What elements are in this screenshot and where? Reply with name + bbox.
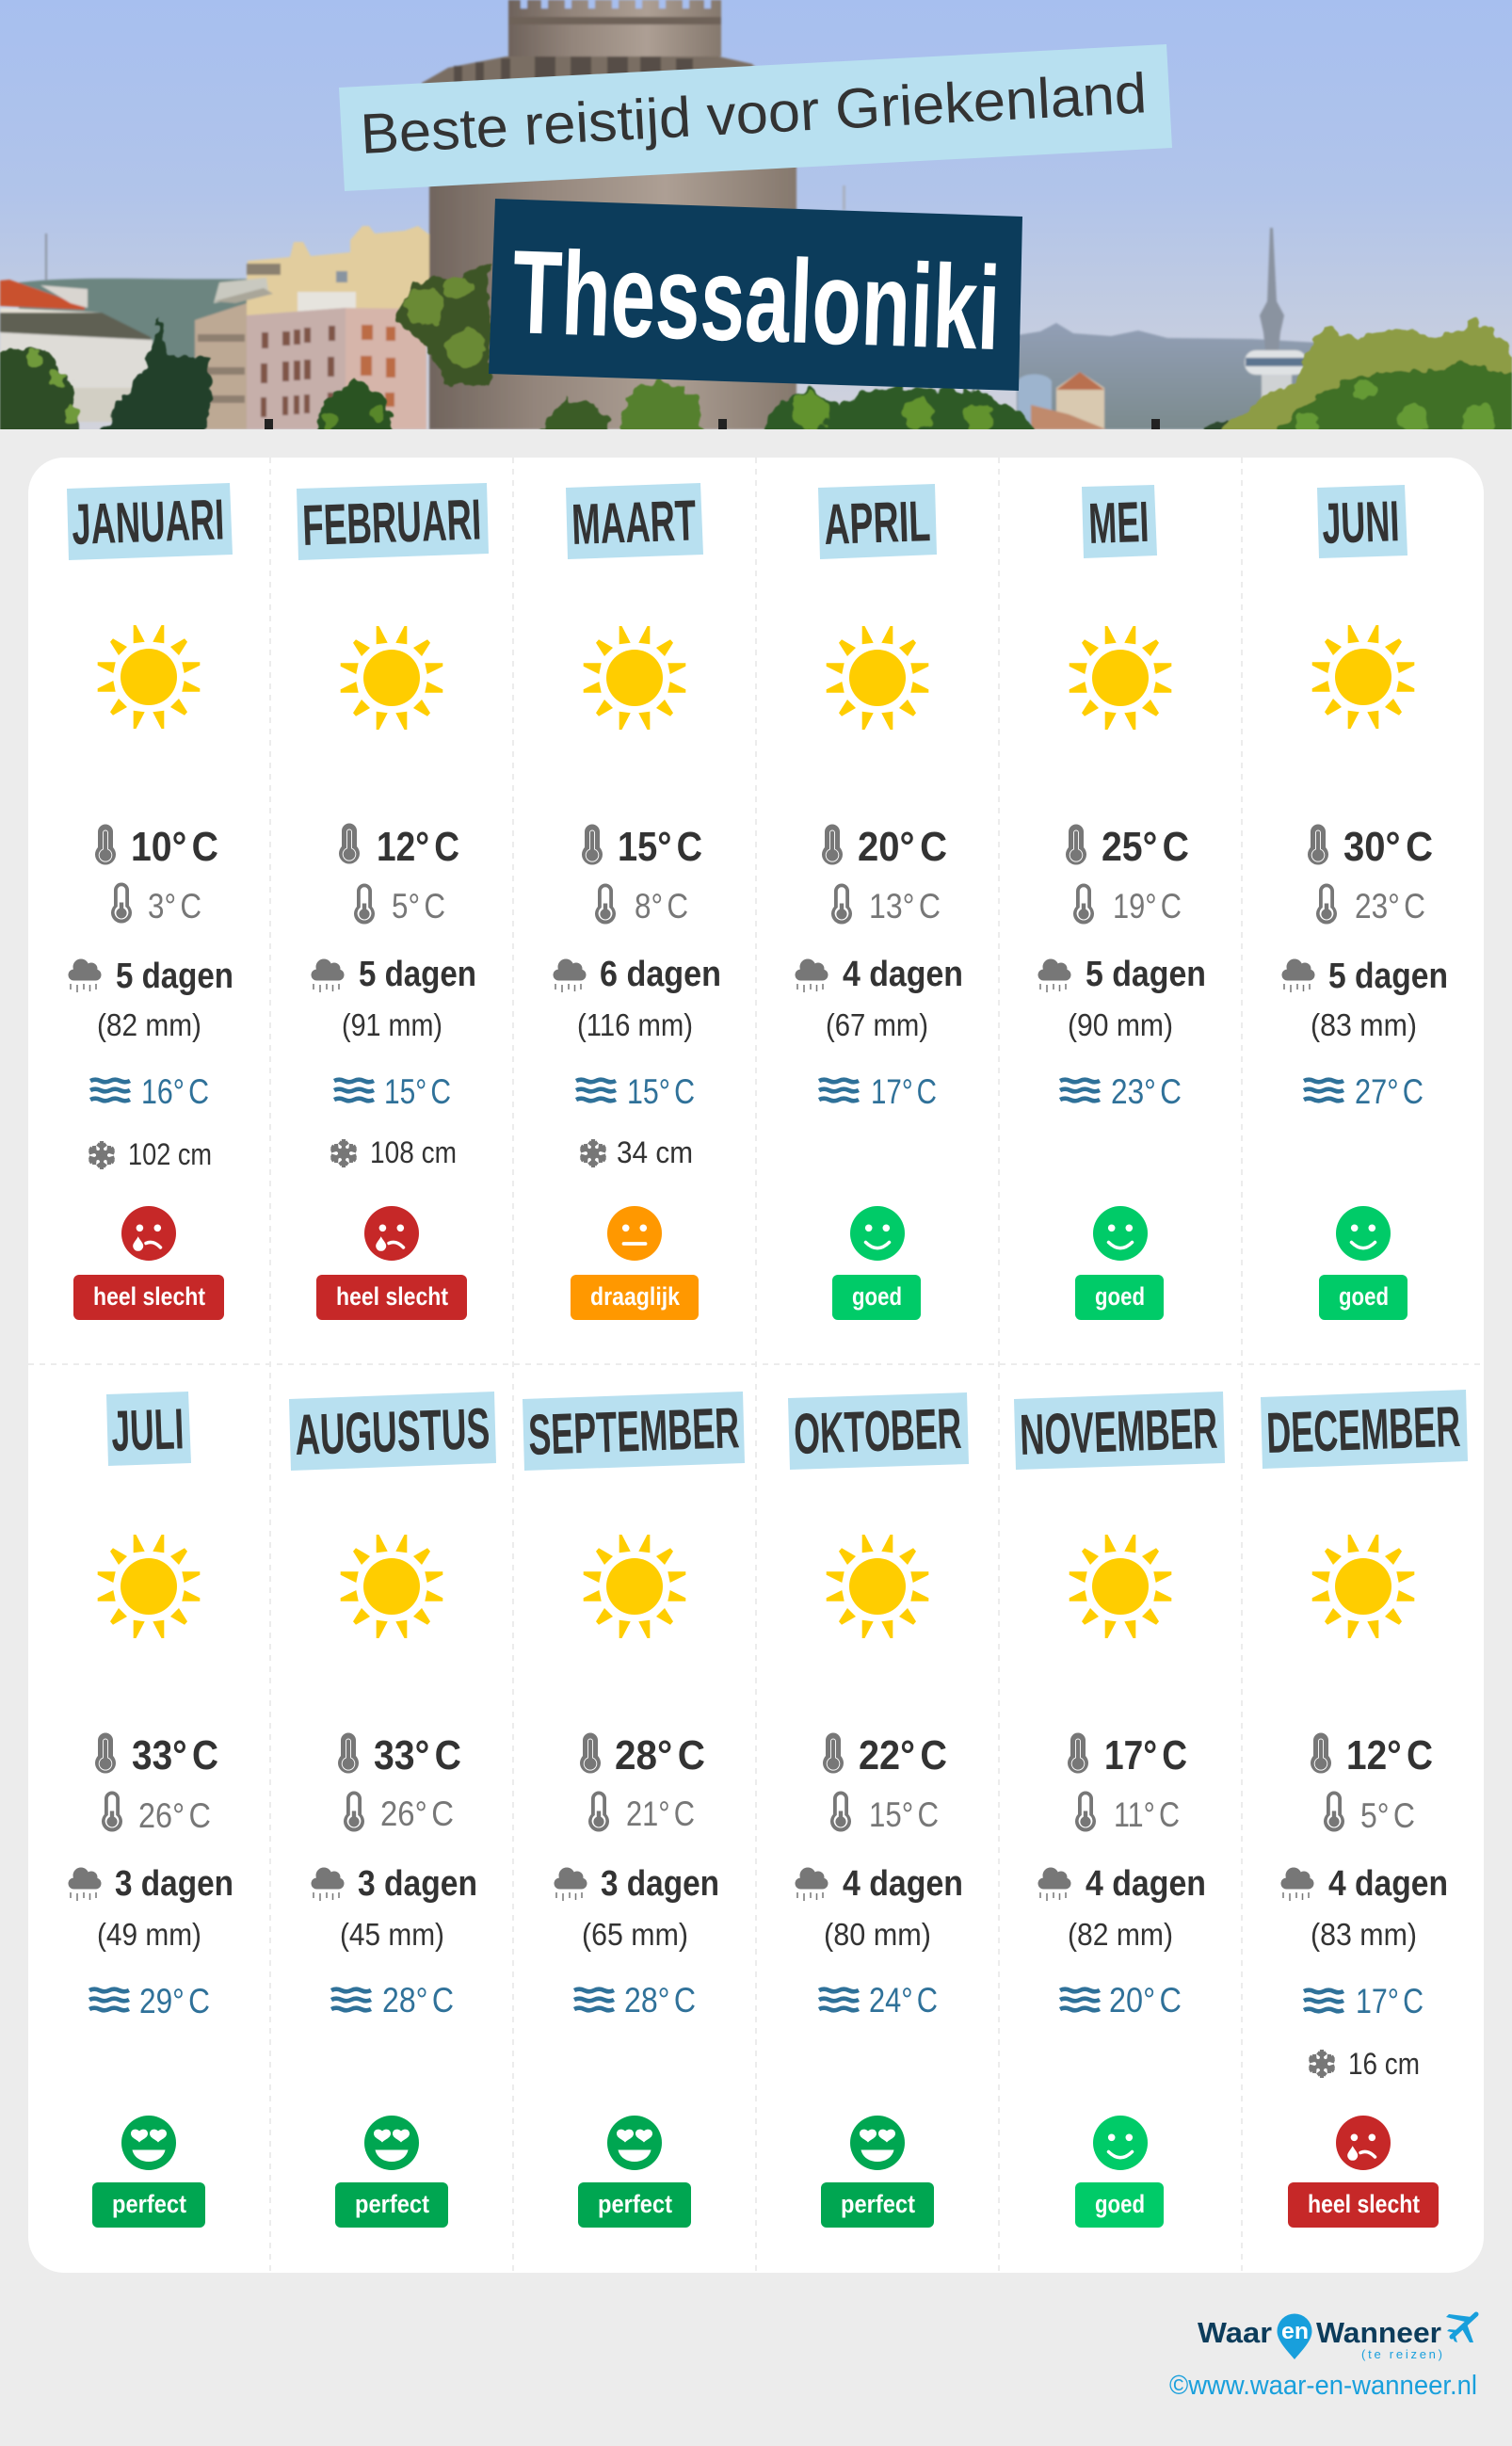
icon: sun (827, 1535, 928, 1638)
rain days: 4 dagen (1086, 1864, 1206, 1904)
rain days (795, 1864, 963, 1904)
max temperature: 28° C (615, 1732, 705, 1778)
rainfall: (116 mm) (577, 1007, 693, 1042)
snowfall: 102 cm (128, 1137, 212, 1171)
rating label: goed (1095, 1282, 1145, 1311)
icon: sun (827, 626, 928, 730)
max temperature (1311, 1732, 1433, 1778)
icon: neutral face (607, 1206, 662, 1261)
max temperature (822, 824, 947, 870)
min temperature: 8° C (635, 887, 688, 925)
rating label (578, 2182, 691, 2228)
min temperature (830, 1791, 939, 1834)
min temperature: 5° C (1360, 1796, 1415, 1835)
rain days (68, 1864, 233, 1904)
max temperature: 12° C (1346, 1732, 1433, 1778)
rain days (311, 955, 476, 994)
icon: smiling face (1093, 2116, 1148, 2170)
snowfall (1309, 2047, 1420, 2081)
sea temperature: 15° C (384, 1072, 451, 1111)
max temperature (1068, 1732, 1187, 1778)
month tag: JANUARI (71, 487, 225, 556)
month tag: NOVEMBER (1019, 1396, 1218, 1467)
snowfall: 16 cm (1348, 2047, 1420, 2081)
month tag: JULI (110, 1396, 185, 1463)
min temperature (1316, 883, 1425, 925)
month: maart (554, 483, 721, 1320)
month tag: AUGUSTUS (294, 1396, 491, 1467)
icon: heart-eyes face (850, 2116, 905, 2170)
rainfall: (91 mm) (342, 1007, 442, 1042)
title banner: Thessaloniki (489, 199, 1022, 391)
white panel with month grid (28, 458, 1484, 2273)
min temperature: 13° C (869, 887, 941, 925)
header photo: White Tower of Thessaloniki (0, 0, 1512, 443)
rainfall: (90 mm) (1068, 1007, 1173, 1042)
icon: heart-eyes face (364, 2116, 419, 2170)
rating label: heel slecht (1308, 2190, 1420, 2218)
sea temperature: 24° C (869, 1981, 938, 2020)
rainfall: (65 mm) (582, 1917, 688, 1952)
sea temperature: 28° C (624, 1981, 696, 2020)
max temperature (95, 1732, 218, 1778)
rating label (832, 1275, 921, 1320)
rating label (821, 2182, 934, 2228)
month tag: MAART (571, 488, 697, 556)
icon: airplane (1446, 2314, 1476, 2342)
sea temperature: 17° C (1356, 1982, 1424, 2020)
rain days: 5 dagen (359, 955, 476, 994)
month tag (106, 1392, 191, 1466)
month: september (523, 1392, 745, 2228)
rainfall: (80 mm) (824, 1917, 931, 1952)
max temperature: 25° C (1102, 824, 1189, 870)
month: juni (1282, 485, 1448, 1320)
icon: heart-eyes face (121, 2116, 176, 2170)
rating label (1075, 2182, 1164, 2228)
min temperature (831, 883, 941, 925)
rain days: 5 dagen (1086, 955, 1206, 994)
month: april (795, 484, 963, 1320)
rating label (92, 2182, 205, 2228)
month tag (788, 1392, 969, 1470)
min temperature: 3° C (148, 887, 201, 925)
month tag: JUNI (1321, 489, 1400, 555)
title banner: Beste reistijd voor Griekenland: Beste reistijd voor Griekenland (359, 61, 1149, 166)
max temperature (580, 1732, 705, 1778)
sea temperature: 20° C (1109, 1981, 1182, 2020)
min temperature: 5° C (392, 887, 445, 925)
rain days: 5 dagen (1328, 957, 1448, 996)
rain days (1037, 1864, 1206, 1904)
icon: sun (98, 625, 200, 729)
rating label: perfect (112, 2190, 186, 2218)
logo: Waar en Wanneer: (te reizen) (1361, 2347, 1442, 2361)
sea temperature: 16° C (141, 1072, 209, 1111)
icon: heart-eyes face (607, 2116, 662, 2170)
min temperature: 15° C (869, 1795, 939, 1834)
max temperature (338, 1732, 461, 1778)
month: oktober (788, 1392, 969, 2228)
min temperature (1075, 1791, 1180, 1834)
month: juli (68, 1392, 233, 2228)
logo: Waar en Wanneer: en (1281, 2319, 1309, 2344)
month: augustus (289, 1392, 496, 2228)
month tag: SEPTEMBER (527, 1395, 740, 1467)
icon: map pin (1277, 2314, 1312, 2359)
sea temperature: 28° C (382, 1981, 454, 2020)
website url: ©www.waar-en-wanneer.nl (1169, 2371, 1477, 2401)
rating label: perfect (355, 2190, 429, 2218)
rating label: heel slecht (93, 1282, 205, 1311)
max temperature: 30° C (1343, 824, 1433, 870)
icon: crying face (1336, 2116, 1391, 2170)
min temperature (102, 1791, 211, 1835)
icon: sun (1312, 625, 1414, 729)
rain days (1037, 955, 1206, 994)
max temperature (1308, 824, 1433, 870)
max temperature: 20° C (858, 824, 947, 870)
sea temperature: 17° C (871, 1072, 937, 1111)
sea temperature (90, 1072, 209, 1111)
rating label: perfect (841, 2190, 915, 2218)
icon: smiling face (850, 1206, 905, 1261)
rating label: perfect (598, 2190, 672, 2218)
sea temperature (1304, 1072, 1424, 1111)
sea temperature: 29° C (139, 1982, 210, 2020)
rating label: goed (1339, 1282, 1389, 1311)
snowfall (580, 1135, 693, 1169)
month tag (67, 483, 233, 560)
min temperature (588, 1791, 695, 1833)
rating label: heel slecht (336, 1282, 448, 1311)
month tag: MEI (1087, 490, 1150, 555)
rain days (1282, 957, 1448, 996)
max temperature (95, 824, 218, 870)
sea temperature (89, 1982, 210, 2020)
month: januari (67, 483, 233, 1320)
icon: sun (584, 626, 685, 730)
sea temperature (331, 1981, 454, 2020)
month tag (818, 484, 937, 559)
rain days: 4 dagen (843, 1864, 963, 1904)
rain days: 5 dagen (116, 957, 233, 996)
logo: Waar en Wanneer (1198, 2314, 1476, 2361)
icon: sun (341, 626, 442, 730)
rain days (795, 955, 963, 994)
icon: sun (98, 1535, 200, 1638)
min temperature: 21° C (626, 1794, 695, 1833)
max temperature: 17° C (1104, 1732, 1187, 1778)
logo: Waar en Wanneer: Waar (1198, 2316, 1272, 2349)
min temperature: 26° C (380, 1794, 454, 1833)
rating label (1319, 1275, 1407, 1320)
sea temperature (1060, 1981, 1182, 2020)
min temperature (111, 883, 201, 925)
sea temperature (819, 1981, 938, 2020)
rain days (68, 957, 233, 996)
rainfall: (82 mm) (1068, 1917, 1173, 1952)
month: mei (1037, 485, 1206, 1320)
max temperature: 12° C (377, 824, 459, 870)
rainfall: (49 mm) (97, 1917, 201, 1952)
icon: sun (584, 1535, 685, 1638)
max temperature (339, 823, 459, 870)
sea temperature (819, 1072, 937, 1111)
icon: crying face (121, 1206, 176, 1261)
rain days (311, 1864, 477, 1904)
month tag: APRIL (823, 489, 931, 556)
snowfall (331, 1135, 457, 1169)
max temperature: 33° C (374, 1732, 461, 1778)
icon: sun (1070, 1535, 1171, 1638)
min temperature (1073, 883, 1182, 925)
min temperature: 26° C (138, 1796, 211, 1835)
min temperature: 23° C (1355, 887, 1425, 925)
icon: smiling face (1336, 1206, 1391, 1261)
title banner: Beste reistijd voor Griekenland (339, 44, 1172, 191)
rain days (554, 1864, 719, 1904)
rainfall: (67 mm) (826, 1007, 928, 1042)
rating label (571, 1275, 699, 1320)
sea temperature: 15° C (627, 1072, 695, 1111)
min temperature: 11° C (1114, 1795, 1180, 1834)
rain days (1280, 1864, 1448, 1904)
month: december (1261, 1390, 1468, 2228)
month tag (1014, 1392, 1225, 1470)
rating label (1288, 2182, 1439, 2228)
rain days (554, 955, 721, 994)
month: februari (297, 483, 489, 1320)
min temperature (354, 883, 445, 925)
month tag (1317, 485, 1407, 558)
month: november (1014, 1392, 1225, 2228)
rating label: goed (1095, 2190, 1145, 2218)
max temperature: 33° C (132, 1732, 218, 1778)
icon: crying face (364, 1206, 419, 1261)
rating label (1075, 1275, 1164, 1320)
rain days: 3 dagen (601, 1864, 719, 1904)
sea temperature: 23° C (1111, 1072, 1182, 1111)
min temperature: 19° C (1113, 887, 1182, 925)
rainfall: (82 mm) (97, 1007, 201, 1042)
min temperature (1324, 1791, 1415, 1835)
max temperature (582, 824, 702, 870)
month tag (289, 1392, 496, 1471)
sea temperature: 27° C (1355, 1072, 1424, 1111)
month tag (1082, 485, 1157, 558)
min temperature (595, 883, 688, 925)
month tag (566, 483, 703, 559)
month tag (297, 483, 489, 560)
logo: Waar en Wanneer: Wanneer (1316, 2316, 1441, 2349)
icon: sun (1070, 626, 1171, 730)
snowfall: 34 cm (617, 1135, 693, 1169)
rain days: 4 dagen (843, 955, 963, 994)
snowfall: 108 cm (370, 1135, 457, 1169)
rating label (73, 1275, 224, 1320)
rain days: 3 dagen (115, 1864, 233, 1904)
month tag: FEBRUARI (301, 487, 482, 557)
max temperature (823, 1732, 947, 1778)
icon: sun (1312, 1535, 1414, 1638)
sea temperature (334, 1072, 451, 1111)
rain days: 6 dagen (600, 955, 721, 994)
rating label (335, 2182, 448, 2228)
max temperature (1066, 824, 1189, 870)
sea temperature (576, 1072, 695, 1111)
title banner: Thessaloniki: Thessaloniki (510, 225, 1003, 375)
max temperature: 15° C (618, 824, 702, 870)
min temperature (344, 1791, 454, 1833)
snowfall (88, 1137, 212, 1171)
month tag: OKTOBER (793, 1396, 962, 1466)
max temperature: 22° C (859, 1732, 947, 1778)
sea temperature (574, 1981, 696, 2020)
rain days: 3 dagen (358, 1864, 477, 1904)
rainfall: (45 mm) (340, 1917, 444, 1952)
rainfall: (83 mm) (1311, 1007, 1417, 1042)
rating label: draaglijk (590, 1282, 681, 1311)
rating label: goed (852, 1282, 902, 1311)
icon: sun (341, 1535, 442, 1638)
month tag (523, 1392, 745, 1471)
rating label (316, 1275, 467, 1320)
max temperature: 10° C (131, 824, 218, 870)
sea temperature (1060, 1072, 1182, 1111)
rainfall: (83 mm) (1311, 1917, 1417, 1952)
icon: smiling face (1093, 1206, 1148, 1261)
sea temperature (1304, 1982, 1424, 2020)
rain days: 4 dagen (1328, 1864, 1448, 1904)
